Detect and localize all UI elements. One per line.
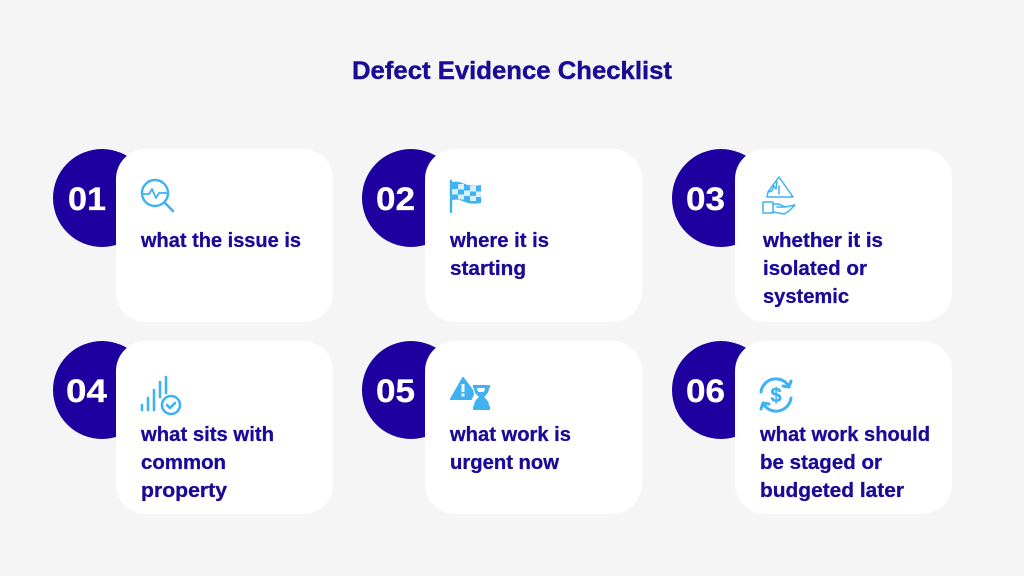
- icon: magnifier with pulse: [142, 180, 173, 211]
- text: whether it is isolated or systemic: isolated or: [763, 258, 867, 280]
- panel: step 03: [672, 149, 952, 322]
- text: what work should be staged or budgeted later: [759, 424, 930, 502]
- panel: step 06: [672, 341, 952, 514]
- text: what sits with common property: property: [141, 480, 228, 502]
- number badge 05: [362, 341, 460, 439]
- text: whether it is isolated or systemic: systemic: [763, 286, 849, 308]
- number badge 06: 06: [686, 373, 725, 409]
- text: whether it is isolated or systemic: [762, 230, 883, 308]
- number badge 04: [53, 341, 151, 439]
- card 05: [425, 341, 642, 514]
- text: what work is urgent now: what work is: [449, 424, 571, 446]
- number badge 03: [672, 149, 770, 247]
- card 03: [735, 149, 952, 322]
- text: what work should be staged or budgeted later: what work should: [759, 424, 930, 446]
- text: where it is starting: starting: [450, 258, 526, 280]
- card 06: [735, 341, 952, 514]
- text: where it is starting: where it is: [449, 230, 549, 252]
- number badge 01: 01: [68, 181, 106, 217]
- icon: warning triangle and hourglass: [451, 378, 490, 410]
- text: what work is urgent now: [449, 424, 571, 474]
- panel: step 05: [362, 341, 642, 514]
- number badge 06: [672, 341, 770, 439]
- card 02: [425, 149, 642, 322]
- text: what the issue is: what the issue is: [140, 230, 301, 252]
- number badge 02: [362, 149, 460, 247]
- panel: step 01: [53, 149, 333, 322]
- text: what sits with common property: common: [141, 452, 226, 474]
- text: what sits with common property: what sits with: [140, 424, 274, 446]
- icon: hand holding iceberg: [763, 177, 795, 214]
- text: what sits with common property: [140, 424, 274, 502]
- icon: dollar with circular arrows: $: [770, 385, 782, 407]
- card 04: [116, 341, 333, 514]
- text: what work should be staged or budgeted later: be staged or: [760, 452, 882, 474]
- icon: rising bars with check: [142, 377, 180, 414]
- number badge 02: 02: [376, 181, 415, 217]
- text: what work is urgent now: urgent now: [450, 452, 559, 474]
- icon: checkered flag: [451, 181, 481, 212]
- text: what work should be staged or budgeted later: budgeted later: [760, 480, 904, 502]
- number badge 03: 03: [686, 181, 725, 217]
- text: whether it is isolated or systemic: whether it is: [762, 230, 883, 252]
- title: Defect Evidence Checklist: [352, 57, 673, 85]
- number badge 04: 04: [66, 373, 107, 409]
- icon: dollar with circular arrows: [761, 379, 791, 411]
- panel: step 04: [53, 341, 333, 514]
- panel: step 02: [362, 149, 642, 322]
- text: where it is starting: [449, 230, 549, 280]
- number badge 01: [53, 149, 151, 247]
- number badge 05: 05: [376, 373, 415, 409]
- card 01: [116, 149, 333, 322]
